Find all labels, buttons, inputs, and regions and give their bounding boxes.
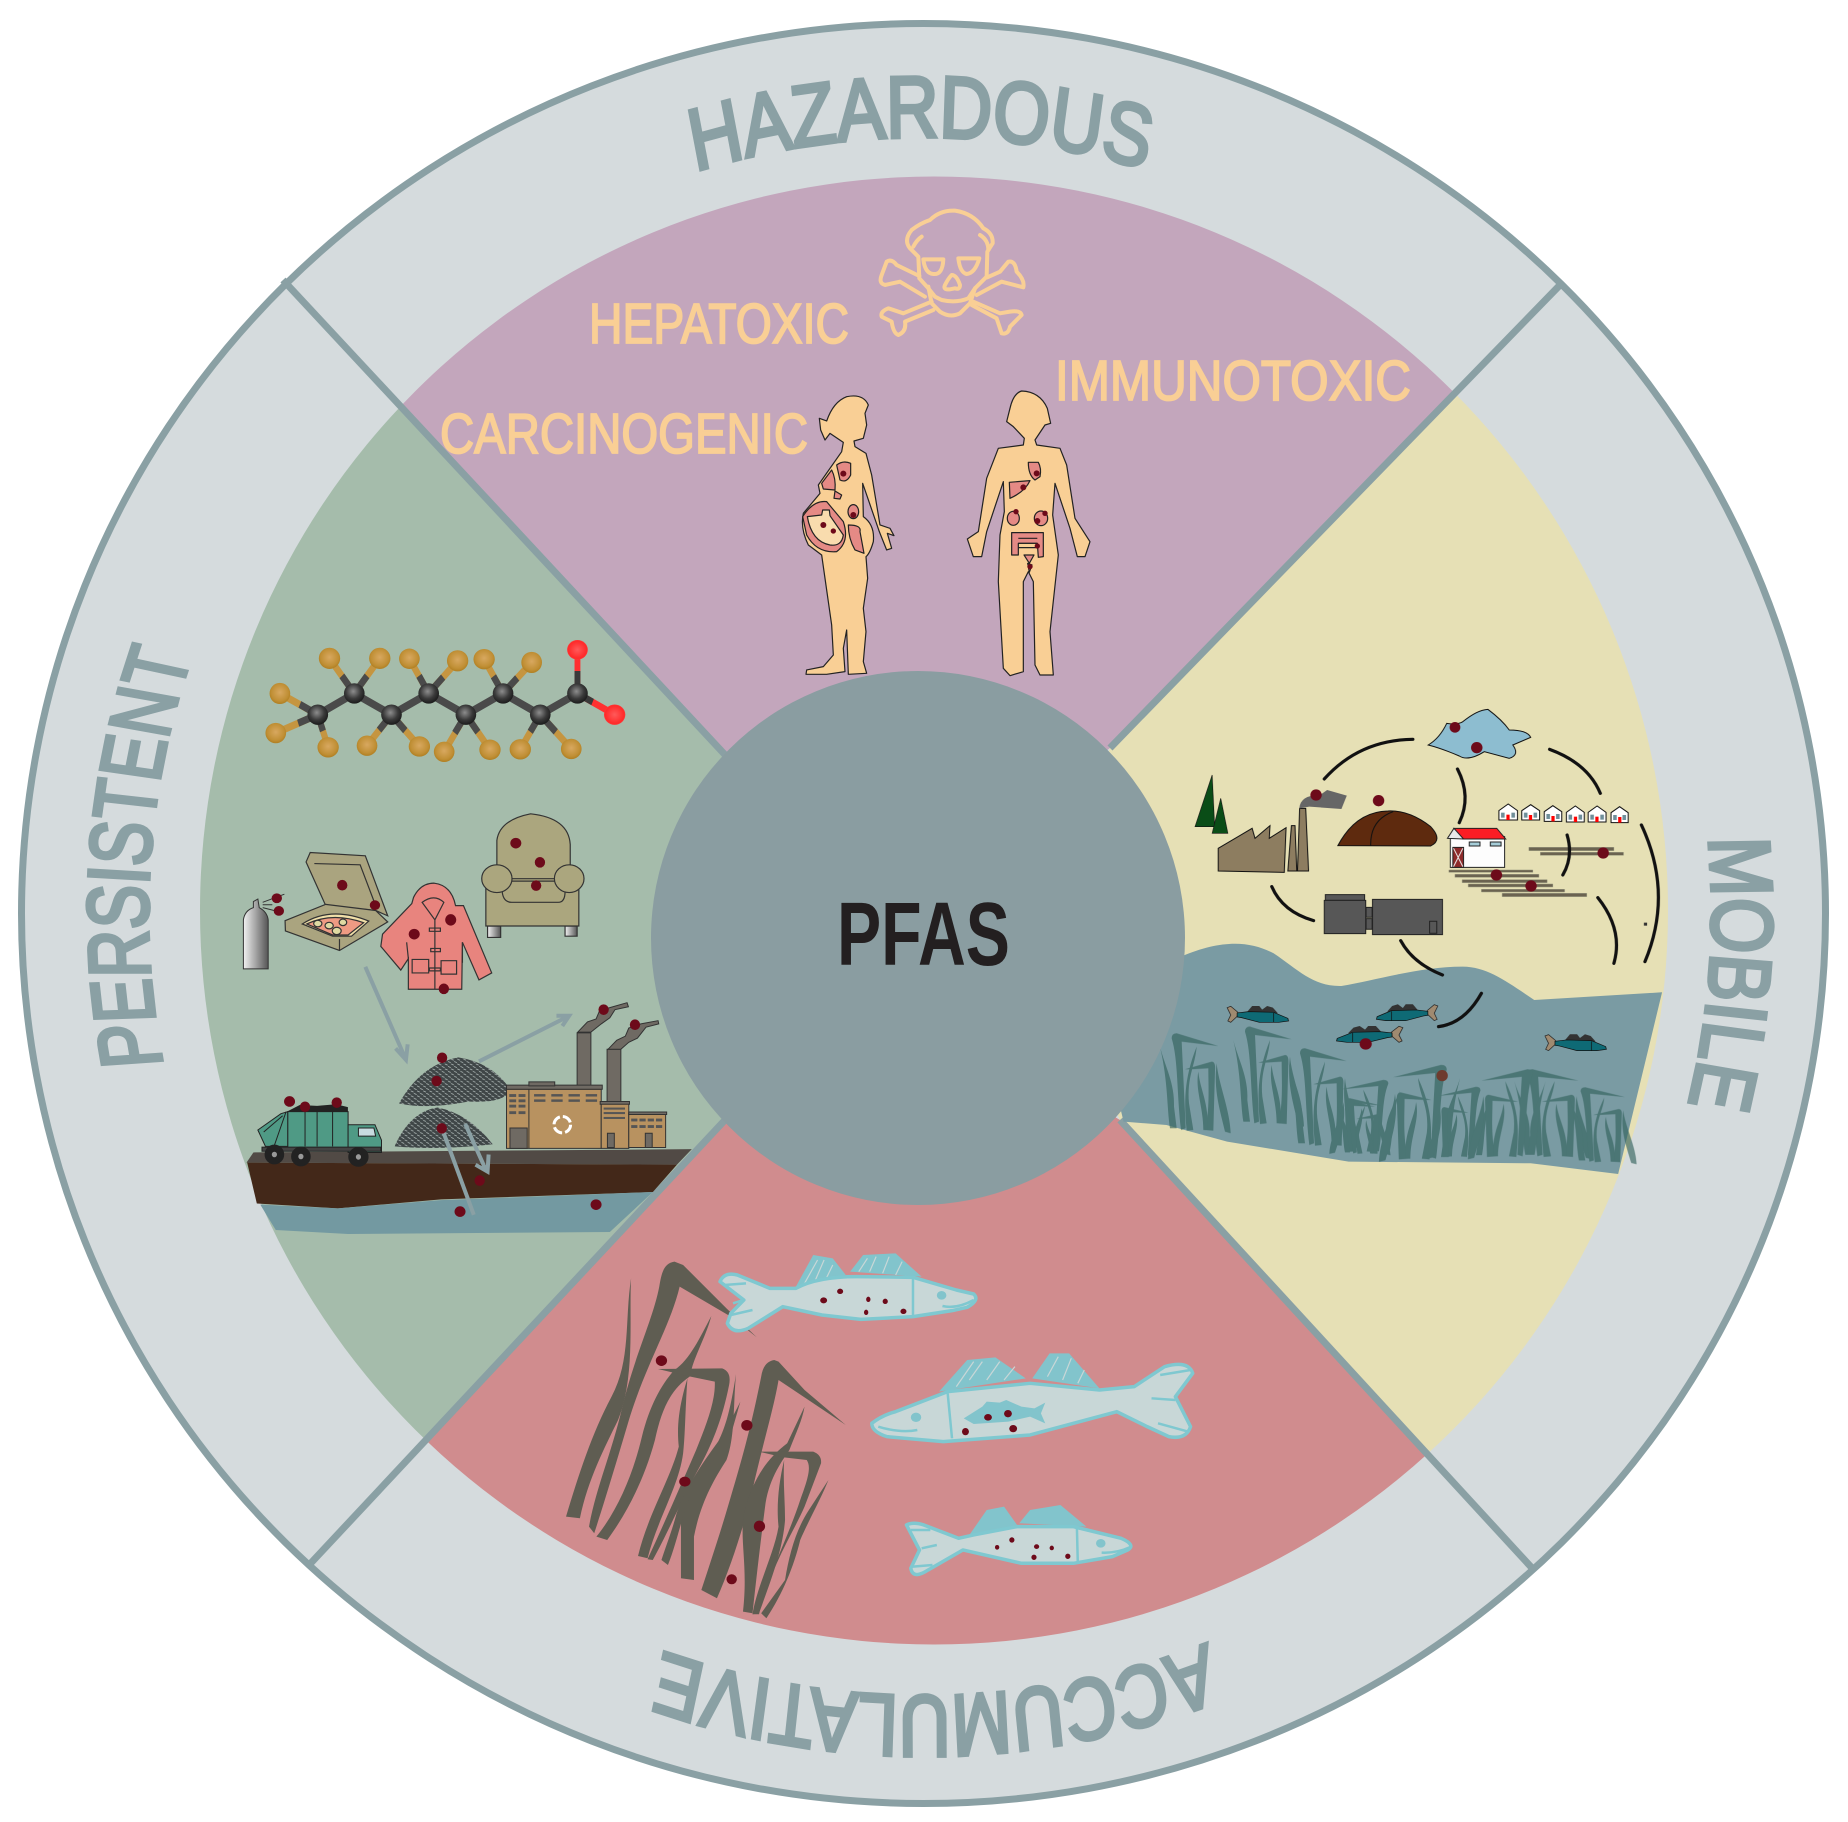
crop fields [1449, 847, 1624, 897]
ring dividers [283, 280, 1560, 1568]
recycling plant [507, 1003, 667, 1148]
icon: factory [1218, 790, 1347, 872]
icon: skull and crossbones [881, 211, 1024, 335]
fish school [1227, 1004, 1606, 1051]
icon: armchair [482, 814, 584, 937]
icon: barn [1447, 828, 1506, 867]
contaminant dots [284, 1004, 640, 1217]
contaminant dots [1310, 722, 1647, 1081]
waste heaps [395, 1057, 510, 1148]
sector: hazardous [403, 176, 1452, 752]
figure: pregnant woman [802, 396, 894, 674]
panel: hazardous content [440, 211, 1411, 676]
panel: mobile content [1120, 709, 1662, 1174]
trees [1195, 775, 1228, 833]
label: CARCINOGENIC: CARCINOGENIC [440, 402, 808, 466]
molecule [265, 640, 625, 762]
icon: soil pile [1338, 811, 1437, 846]
label: IMMUNOTOXIC: IMMUNOTOXIC [1055, 349, 1411, 413]
fish: small top [720, 1253, 976, 1331]
arrows: material flows [365, 967, 569, 1215]
label: HEPATOXIC: HEPATOXIC [589, 292, 849, 356]
seagrass [566, 1262, 846, 1618]
sector: mobile [1108, 396, 1668, 1452]
fish: small bottom [906, 1505, 1131, 1575]
ground layers [246, 1149, 692, 1234]
centre circle [651, 671, 1185, 1205]
panel: accumulative content [566, 1253, 1193, 1618]
sector: persistent [200, 409, 722, 1438]
icon: cloud [1428, 709, 1531, 758]
icon: garbage truck [258, 1105, 381, 1166]
arrows: transport cycle [1272, 739, 1658, 1027]
heading: PERSISTENT: PERSISTENT [85, 642, 189, 1066]
figure: man [967, 391, 1090, 676]
icon: pizza box [285, 853, 388, 950]
heading: MOBILE: MOBILE [1686, 840, 1775, 1113]
icon: houses [1499, 804, 1628, 823]
heading: HAZARDOUS: HAZARDOUS [688, 75, 1152, 172]
heading: ACCUMULATIVE: ACCUMULATIVE [652, 1640, 1209, 1758]
icon: spray can [243, 893, 284, 969]
panel: coloured sectors [200, 176, 1668, 1644]
seagrass [1160, 1027, 1637, 1164]
icon: jacket [381, 883, 492, 994]
title: PFAS: PFAS [837, 885, 1010, 985]
water body [1120, 944, 1662, 1174]
contaminant dots [656, 1355, 765, 1584]
sector: accumulative [428, 1118, 1424, 1644]
panel: persistent content [243, 640, 692, 1234]
fish: large middle [872, 1353, 1193, 1442]
icon: treatment building [1324, 895, 1442, 935]
